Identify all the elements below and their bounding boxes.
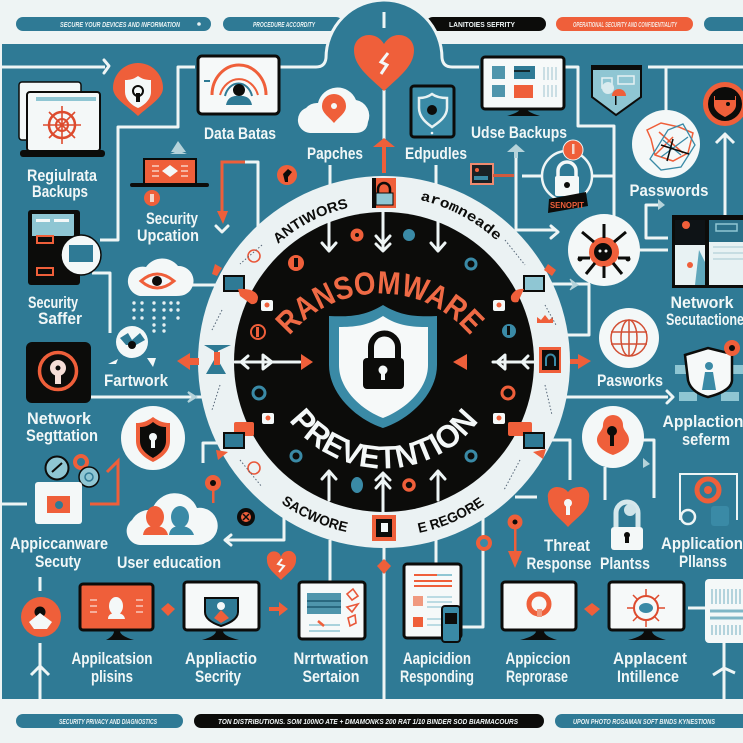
label: papches: Papches xyxy=(307,144,363,163)
icon: small orange gear xyxy=(277,165,297,185)
header pill 2 xyxy=(223,17,343,31)
orange bent line xyxy=(90,461,118,504)
label: appiccion reprorase: Reprorase xyxy=(506,667,568,686)
label: appiccanware security xyxy=(10,534,108,571)
panel: lock badge xyxy=(542,140,592,213)
label: application pllanss xyxy=(661,534,743,571)
label: network secutactione: Network xyxy=(670,293,734,312)
icon: shield tablet xyxy=(411,86,454,137)
icon: server with bubble xyxy=(28,210,101,285)
label: passwords: Passwords xyxy=(630,181,708,200)
header strip xyxy=(0,0,743,43)
panel: papches xyxy=(298,88,369,163)
icon: virus circle xyxy=(568,214,640,286)
icon: document and phone xyxy=(404,564,461,642)
central ring xyxy=(198,176,570,548)
label: regular backups: Backups xyxy=(32,182,88,201)
ring label: antiwors: ANTIWORS xyxy=(274,199,348,244)
label: application plisins: Appilcatsion xyxy=(72,649,152,668)
label: network segtation: Network xyxy=(27,409,92,428)
icon: virus monitor xyxy=(609,582,684,640)
label: nrrtwation sertaion xyxy=(294,649,368,686)
diamond connector xyxy=(161,603,175,616)
label: threat response: Response xyxy=(526,554,592,573)
label: appiccanware security: Secuty xyxy=(35,552,81,571)
icon: orange heart key xyxy=(548,487,589,527)
panel: pasworks xyxy=(597,308,663,390)
icon: up arrow xyxy=(170,141,187,154)
left arrow marker xyxy=(188,392,196,402)
label: application security: Secrity xyxy=(195,667,241,686)
label: network secutactione xyxy=(666,293,743,329)
orange arrow left xyxy=(177,353,199,370)
icon: checklist tablet xyxy=(299,582,365,639)
small arrow marker xyxy=(570,279,578,290)
orange down arrow xyxy=(216,162,245,232)
icon: dashboard monitor xyxy=(482,57,564,116)
label: threat response: Threat xyxy=(544,536,590,555)
header pill 4 xyxy=(556,17,693,31)
label: pasworks: Pasworks xyxy=(597,371,663,390)
panel: regular backups xyxy=(19,82,105,201)
label: application security: Appliactio xyxy=(185,649,257,668)
title: ransomware: RANSOMWARE xyxy=(274,271,486,335)
icon: server racks xyxy=(672,215,743,288)
label: application plisins: plisins xyxy=(91,667,133,686)
label: plantss: Plantss xyxy=(600,554,650,573)
label: appiccanware security: Appiccanware xyxy=(10,534,108,553)
label: threat response xyxy=(526,536,592,573)
ring tile: bottom xyxy=(372,515,396,541)
label: security upcation xyxy=(137,209,199,245)
panel: appiccanware security xyxy=(10,456,108,571)
arrows in the dial xyxy=(235,212,536,515)
icon: orange badge xyxy=(144,190,160,206)
panel: aapicidion responding xyxy=(400,564,474,686)
icon: orange circle shield xyxy=(703,82,743,126)
banner: senopit: SENOPIT xyxy=(550,201,584,210)
title: prevention: PREVETNTION xyxy=(290,408,478,469)
label: application pllanss: Pllanss xyxy=(679,552,727,571)
label: edpudles: Edpudles xyxy=(405,144,467,163)
icon: central shield xyxy=(329,305,437,428)
label: application security xyxy=(185,649,257,686)
ring label: promhenade: aromneade xyxy=(421,194,500,240)
footer strip xyxy=(0,699,743,743)
orange right arrow xyxy=(269,602,288,616)
label: aapicidion responding xyxy=(400,649,474,686)
footer pill 2: TON DISTRIBUTIONS. SOM 100NO ATE + DMAMONKS 200 RAT 1/10 BINDER SOD BIARMACOURS xyxy=(218,719,518,726)
icon: orange pin down arrow xyxy=(508,514,522,568)
icon: white padlock xyxy=(611,502,643,550)
ring tile: right xyxy=(539,347,561,373)
icon: network circle xyxy=(632,110,700,178)
panel: application seferm xyxy=(662,340,743,449)
rain dots xyxy=(132,301,180,333)
label: regular backups: Regiulrata xyxy=(27,166,97,185)
icon: lock circle xyxy=(582,406,644,468)
icon: small tile with orange link xyxy=(471,164,514,184)
icon: orange monitor xyxy=(80,584,153,640)
icon: shield monitor xyxy=(184,582,259,640)
header pill 3: LANITOIES SEFRITY xyxy=(449,22,515,29)
panel: application pllanss xyxy=(661,474,743,571)
label: regular backups xyxy=(27,166,97,201)
label: aapicidion responding: Responding xyxy=(400,667,474,686)
footer pill 1 xyxy=(16,714,183,728)
panel: security saffer xyxy=(28,210,101,328)
icon: padlock xyxy=(363,334,404,389)
panel: data batas xyxy=(198,56,279,143)
icon: shield circle xyxy=(121,406,185,470)
header pill 3 xyxy=(426,17,546,31)
label: security upcation: Upcation xyxy=(137,226,199,245)
icon: small badge on line xyxy=(476,535,492,551)
top arch xyxy=(280,0,479,140)
ring label: e regore: E REGORE xyxy=(418,497,484,533)
icon: cloud with pin xyxy=(298,88,369,133)
footer pill 2 xyxy=(194,714,544,728)
label: fartwork: Fartwork xyxy=(104,371,168,390)
header pill 1 xyxy=(16,17,211,31)
label: application seferm xyxy=(662,412,743,449)
panel: threat response xyxy=(526,487,592,573)
panel: plantss xyxy=(600,502,650,573)
panel: network secutactione xyxy=(666,215,743,329)
icon: cloud with people xyxy=(127,493,218,545)
small arrow tip xyxy=(643,458,650,468)
label: network segtation xyxy=(26,409,98,445)
icon: right data panel xyxy=(705,579,743,643)
panel: fartwork xyxy=(104,326,168,390)
orange arrow right xyxy=(570,354,591,369)
label: security saffer: Saffer xyxy=(38,309,82,328)
panel: network segtation xyxy=(26,342,98,445)
icon: orange avatar circle xyxy=(21,597,61,637)
icon: laptop with virus xyxy=(19,82,105,157)
icon: alert circle xyxy=(563,140,583,160)
label: security upcation: Security xyxy=(146,209,198,228)
label: application seferm: seferm xyxy=(682,430,730,449)
header pill 2: PROCEDURE ACCORDITY xyxy=(253,22,316,29)
panel: udse backups xyxy=(471,57,567,142)
icon: orange arrow top pin xyxy=(205,475,221,503)
label: appiccion reprorase xyxy=(506,649,570,686)
icon: globe circle xyxy=(599,308,659,368)
orange arrow into ring top xyxy=(373,138,395,173)
diamond connector right xyxy=(584,603,600,616)
panel: nrrtwation sertaion xyxy=(294,582,368,686)
diamond on center line xyxy=(377,559,391,574)
label: nrrtwation sertaion: Nrrtwation xyxy=(294,649,368,668)
small dial icons xyxy=(251,228,553,493)
panel: appiccion reprorase xyxy=(502,582,576,686)
label: applacent intillence xyxy=(613,649,687,686)
icon: black lock tile xyxy=(26,342,91,403)
label: nrrtwation sertaion: Sertaion xyxy=(302,667,360,686)
header pill 4: OPERATIONAL SECURITY AND CONFIDENTIALITY xyxy=(573,22,678,29)
icon: gear xyxy=(239,510,253,524)
label: application plisins xyxy=(72,649,152,686)
icon: eye cloud xyxy=(128,258,194,333)
panel: edpudles xyxy=(405,86,467,163)
footer pill 1: SECURITY PRIVACY AND DIAGNOSTICS xyxy=(59,719,157,726)
label: applacent intillence: Intillence xyxy=(617,667,679,686)
icon: shield with figure xyxy=(675,340,743,401)
panel: application plisins xyxy=(72,584,153,686)
icon: orange shield pin xyxy=(113,63,163,116)
small arrow tip xyxy=(658,199,665,210)
icon: orange laptop xyxy=(130,159,209,187)
label: aapicidion responding: Aapicidion xyxy=(403,649,471,668)
icon: up arrow xyxy=(507,144,525,158)
header pill 5 xyxy=(704,17,743,31)
icon: pentagon banner xyxy=(592,66,641,115)
footer pill 3 xyxy=(555,714,743,728)
label: applacent intillence: Applacent xyxy=(613,649,687,668)
icon: key monitor xyxy=(502,582,576,640)
label: network segtation: Segttation xyxy=(26,426,98,445)
icon: top heart xyxy=(354,35,414,91)
label: appiccion reprorase: Appiccion xyxy=(506,649,570,668)
panel: application security xyxy=(184,582,259,686)
ring label: sacwore: SACWORE xyxy=(282,496,348,532)
icon: monitor with arcs xyxy=(198,56,279,114)
ring tile: left funnel xyxy=(204,345,231,374)
panel: applacent intillence xyxy=(609,582,687,686)
label: security saffer xyxy=(28,293,82,328)
header pill 1: SECURE YOUR DEVICES AND INFORMATION xyxy=(60,22,181,29)
label: data batas: Data Batas xyxy=(204,124,276,143)
label: security saffer: Security xyxy=(28,293,78,312)
label: user education: User education xyxy=(117,553,221,572)
ring tile: top lock xyxy=(372,178,396,208)
icon: white circle xyxy=(108,326,156,367)
icon: small heart xyxy=(267,551,296,580)
icon: gear frame xyxy=(680,474,737,526)
label: udse backups: Udse Backups xyxy=(471,123,567,142)
panel: security upcation xyxy=(130,141,209,245)
panel: user education xyxy=(117,493,221,572)
panel: passwords xyxy=(630,110,708,200)
ring corner tiles xyxy=(212,240,556,490)
icon group: gears and box xyxy=(35,456,99,524)
